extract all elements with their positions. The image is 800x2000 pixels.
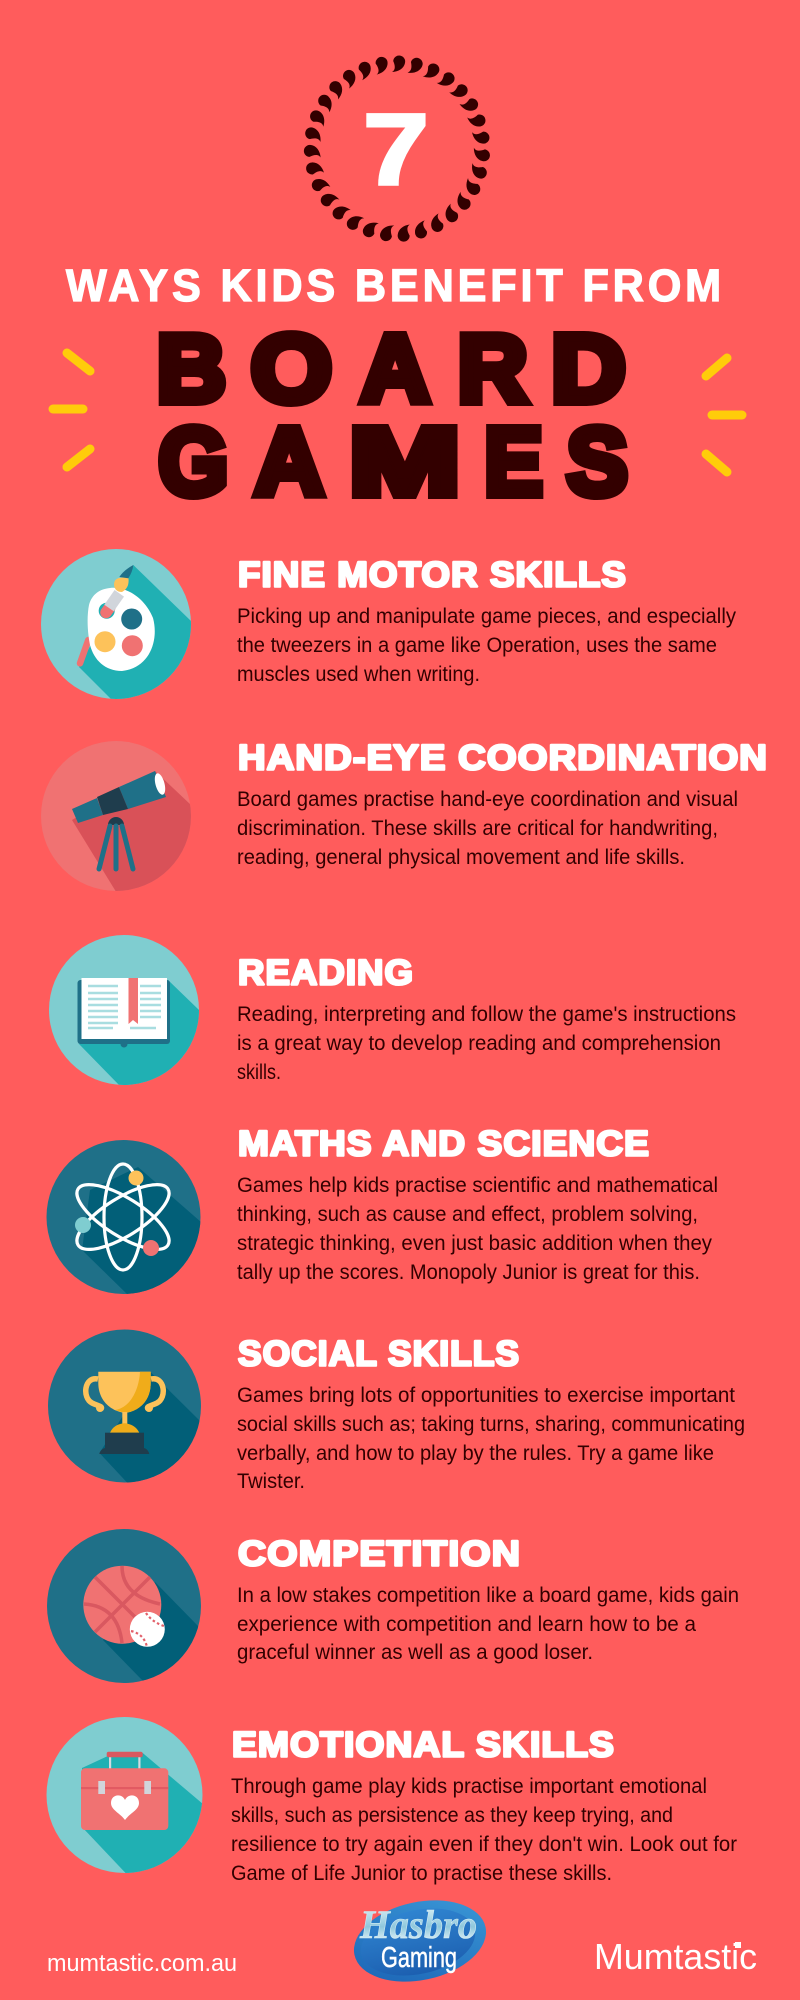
body text: experience with competition and learn how to be a: [237, 1613, 696, 1636]
title: games: [158, 408, 628, 516]
heading: MATHS AND SCIENCE: [238, 1124, 650, 1164]
body text: [237, 788, 738, 869]
body text: muscles used when writing.: [237, 663, 480, 686]
body text: Game of Life Junior to practise these skills.: [231, 1862, 612, 1885]
body text: Games help kids practise scientific and mathematical: [237, 1174, 718, 1197]
title: board: [157, 316, 626, 422]
title: board: B: [157, 316, 226, 422]
title: board: O: [251, 316, 332, 422]
heading: READING: [238, 954, 414, 992]
body text: [231, 1775, 737, 1885]
body text: In a low stakes competition like a board game, kids gain: [237, 1584, 739, 1607]
body text: [237, 605, 736, 686]
website url: mumtastic.com.au: [47, 1950, 237, 1977]
body text: Games bring lots of opportunities to exercise important: [237, 1384, 735, 1407]
icon: open book: [49, 935, 210, 1090]
body text: is a great way to develop reading and comprehension: [237, 1032, 721, 1055]
body text: skills, such as persistence as they keep trying, and: [231, 1804, 673, 1827]
title: games: G: [158, 408, 228, 516]
body text: strategic thinking, even just basic addition when they: [237, 1232, 712, 1255]
body text: skills.: [237, 1061, 281, 1084]
title: games: E: [484, 408, 543, 516]
heading: EMOTIONAL SKILLS: [232, 1726, 615, 1764]
logo: hasbro gaming: [346, 1889, 494, 1993]
body text: verbally, and how to play by the rules. Try a game like: [237, 1442, 714, 1465]
body text: [237, 1003, 736, 1084]
icon: telescope: [41, 741, 191, 891]
body text: the tweezers in a game like Operation, uses the same: [237, 634, 717, 657]
body text: [237, 1584, 739, 1664]
body text: graceful winner as well as a good loser.: [237, 1641, 593, 1664]
panel: maths and science: [46, 1124, 718, 1300]
body text: Through game play kids practise important emotional: [231, 1775, 707, 1798]
title: board: R: [458, 316, 528, 422]
panel: reading: [49, 935, 736, 1090]
icon: first aid case with heart: [46, 1717, 202, 1873]
body text: [237, 1384, 745, 1493]
title: games: M: [349, 408, 460, 516]
panel: emotional skills: [46, 1717, 737, 1885]
title: games: S: [567, 408, 628, 516]
heading: HAND-EYE COORDINATION: [238, 738, 768, 778]
title: games: A: [254, 408, 324, 516]
panel: competition: [47, 1529, 739, 1690]
numeral 7: 7: [363, 94, 429, 206]
yellow sparkle right: [706, 358, 742, 472]
panel: hand-eye coordination: [41, 738, 768, 900]
number seven badge: [304, 56, 490, 242]
body text: discrimination. These skills are critical for handwriting,: [237, 817, 718, 840]
ring of drops: [304, 56, 490, 242]
body text: resilience to try again even if they don't win. Look out for: [231, 1833, 737, 1856]
panel: social skills: [48, 1330, 745, 1493]
body text: Board games practise hand-eye coordination and visual: [237, 788, 738, 811]
heading: SOCIAL SKILLS: [238, 1334, 520, 1374]
heading: FINE MOTOR SKILLS: [238, 556, 627, 594]
yellow sparkle left: [53, 353, 90, 467]
title: board: A: [360, 316, 430, 422]
heading: COMPETITION: [238, 1534, 521, 1574]
icon: paint palette: [41, 549, 191, 699]
panel: fine motor skills: [41, 549, 736, 700]
body text: [237, 1174, 718, 1284]
logo: mumtastic: Mumtastic: [594, 1936, 757, 1977]
body text: reading, general physical movement and life skills.: [237, 846, 685, 869]
logo: hasbro gaming: Hasbro: [359, 1902, 477, 1947]
body text: social skills such as; taking turns, sharing, communicating: [237, 1413, 745, 1436]
logo: hasbro gaming: Gaming: [381, 1942, 457, 1974]
body text: Picking up and manipulate game pieces, and especially: [237, 605, 736, 628]
title: ways kids benefit from: WAYS KIDS BENEFIT FROM: [66, 260, 725, 311]
body text: tally up the scores. Monopoly Junior is great for this.: [237, 1261, 700, 1284]
body text: Twister.: [237, 1470, 305, 1493]
icon: atom: [46, 1140, 210, 1300]
icon: basketball and baseball: [47, 1529, 210, 1690]
body text: Reading, interpreting and follow the game's instructions: [237, 1003, 736, 1026]
icon: trophy: [48, 1330, 210, 1490]
body text: thinking, such as cause and effect, problem solving,: [237, 1203, 698, 1226]
title: board: D: [551, 316, 626, 422]
